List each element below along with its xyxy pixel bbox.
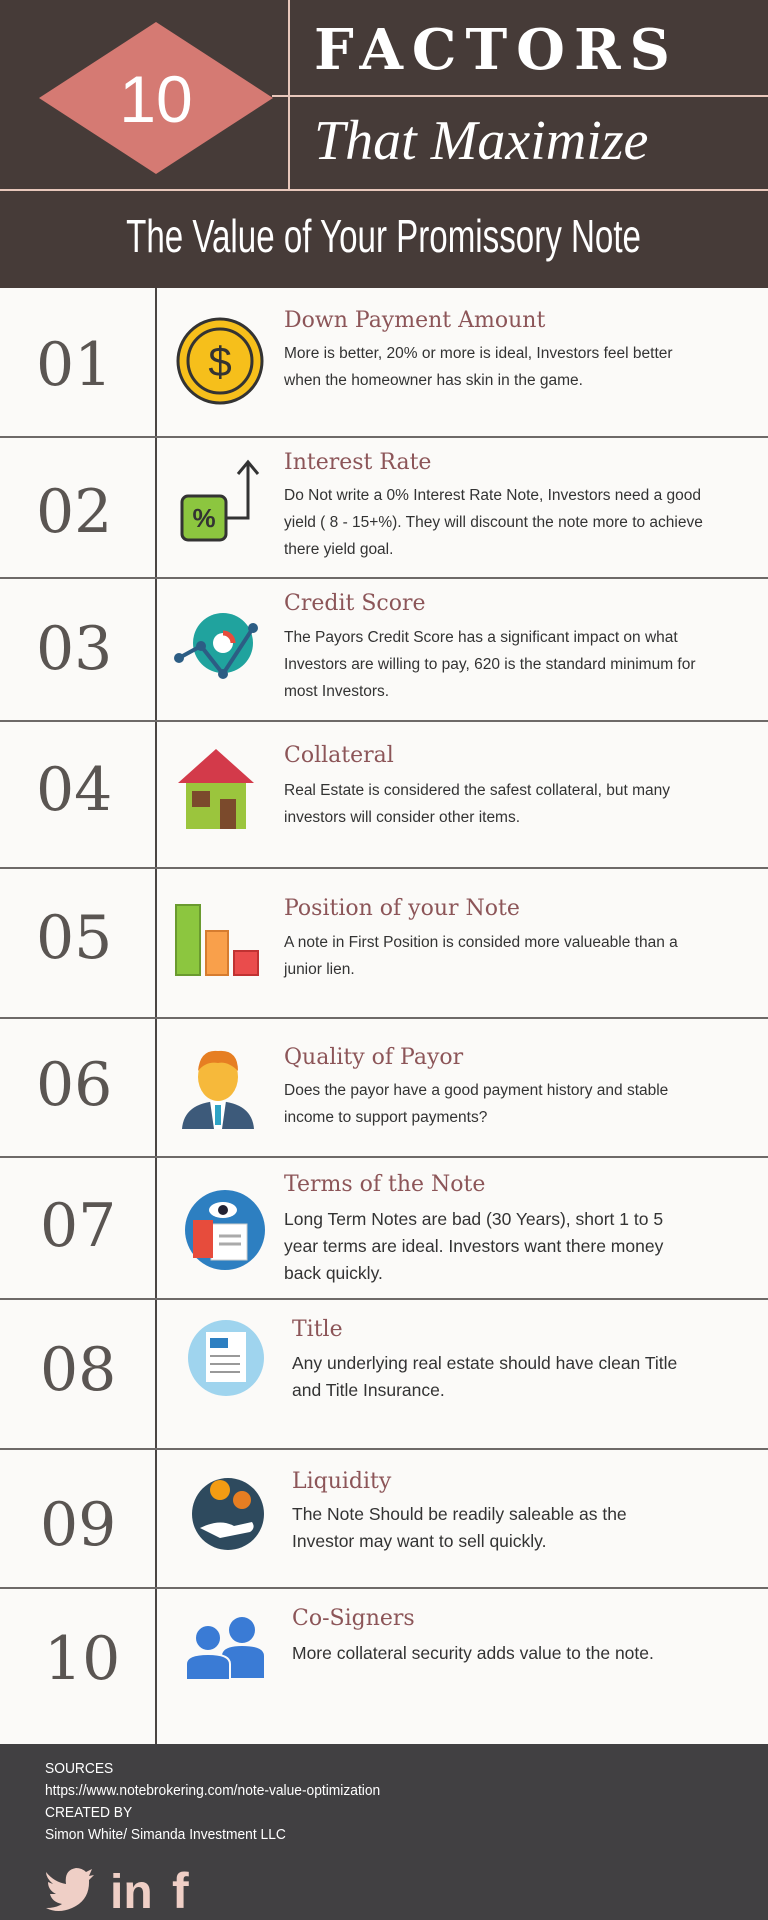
row 10: 10 bbox=[44, 1624, 120, 1694]
text: More is better, 20% or more is ideal, Investors feel better when the homeowner has skin in the game. bbox=[284, 345, 673, 389]
text: Do Not write a 0% Interest Rate Note, Investors need a good yield ( 8 - 15+%). They will discount the note more to achieve there yield goal. bbox=[284, 487, 703, 558]
row 07: 07 bbox=[40, 1191, 116, 1261]
icon: co-signers bbox=[187, 1617, 264, 1679]
title: That Maximize: That Maximize bbox=[314, 110, 648, 172]
row 02: 02 bbox=[36, 477, 112, 547]
diamond badge: 10 bbox=[119, 62, 193, 136]
icon: coin: $ bbox=[208, 338, 232, 385]
icon: coin bbox=[176, 318, 264, 404]
header bbox=[0, 0, 768, 288]
icon: title document bbox=[188, 1320, 264, 1396]
icon: liquidity bbox=[192, 1478, 264, 1550]
diamond badge bbox=[39, 22, 273, 174]
footer bbox=[0, 1744, 768, 1920]
title: FACTORS: FACTORS bbox=[314, 17, 679, 83]
row 06: 06 bbox=[36, 1050, 112, 1120]
icon: payor bbox=[182, 1050, 254, 1129]
text: Quality of Payor: Quality of Payor bbox=[284, 1045, 463, 1070]
icon: house bbox=[178, 749, 254, 829]
row 04: 04 bbox=[36, 755, 112, 825]
icon: terms bbox=[185, 1190, 265, 1270]
text: The Payors Credit Score has a significant impact on what Investors are willing to pay, 620 is the standard minimum for most Investors. bbox=[284, 629, 696, 700]
row 01: 01 bbox=[36, 330, 112, 400]
text: Long Term Notes are bad (30 Years), short 1 to 5 year terms are ideal. Investors want there money back quickly. bbox=[284, 1209, 663, 1283]
sources text: CREATED BY bbox=[45, 1804, 132, 1821]
text: Down Payment Amount: Down Payment Amount bbox=[284, 308, 545, 333]
text: Co-Signers: Co-Signers bbox=[292, 1606, 415, 1631]
text: Interest Rate: Interest Rate bbox=[284, 450, 431, 475]
icon: interest bbox=[180, 460, 260, 542]
row 09: 09 bbox=[40, 1490, 116, 1560]
sources text: https://www.notebrokering.com/note-value-optimization bbox=[45, 1782, 380, 1799]
social icons bbox=[46, 1864, 189, 1914]
text: Liquidity: Liquidity bbox=[292, 1469, 391, 1494]
text: More collateral security adds value to the note. bbox=[292, 1643, 654, 1663]
text: Real Estate is considered the safest collateral, but many investors will consider other items. bbox=[284, 782, 670, 826]
sources text: Simon White/ Simanda Investment LLC bbox=[45, 1826, 286, 1843]
text: Does the payor have a good payment history and stable income to support payments? bbox=[284, 1082, 668, 1126]
icon: bars bbox=[175, 904, 259, 976]
text: The Note Should be readily saleable as the Investor may want to sell quickly. bbox=[292, 1504, 627, 1551]
text: Position of your Note: Position of your Note bbox=[284, 896, 520, 921]
sources text: SOURCES bbox=[45, 1760, 113, 1777]
text: A note in First Position is consided more valueable than a junior lien. bbox=[284, 934, 678, 978]
text: Title: Title bbox=[292, 1317, 343, 1342]
row 03: 03 bbox=[36, 614, 112, 684]
sources text bbox=[45, 1760, 380, 1843]
row 08: 08 bbox=[40, 1335, 116, 1405]
text: Collateral: Collateral bbox=[284, 743, 394, 768]
text: Any underlying real estate should have clean Title and Title Insurance. bbox=[292, 1353, 677, 1400]
row 05: 05 bbox=[36, 903, 112, 973]
icon: interest: % bbox=[192, 503, 216, 533]
icon: credit chart bbox=[174, 613, 258, 679]
vertical divider bbox=[155, 288, 157, 1744]
text: Terms of the Note: Terms of the Note bbox=[284, 1172, 485, 1197]
text: Credit Score: Credit Score bbox=[284, 591, 426, 616]
subtitle: The Value of Your Promissory Note bbox=[127, 210, 641, 262]
